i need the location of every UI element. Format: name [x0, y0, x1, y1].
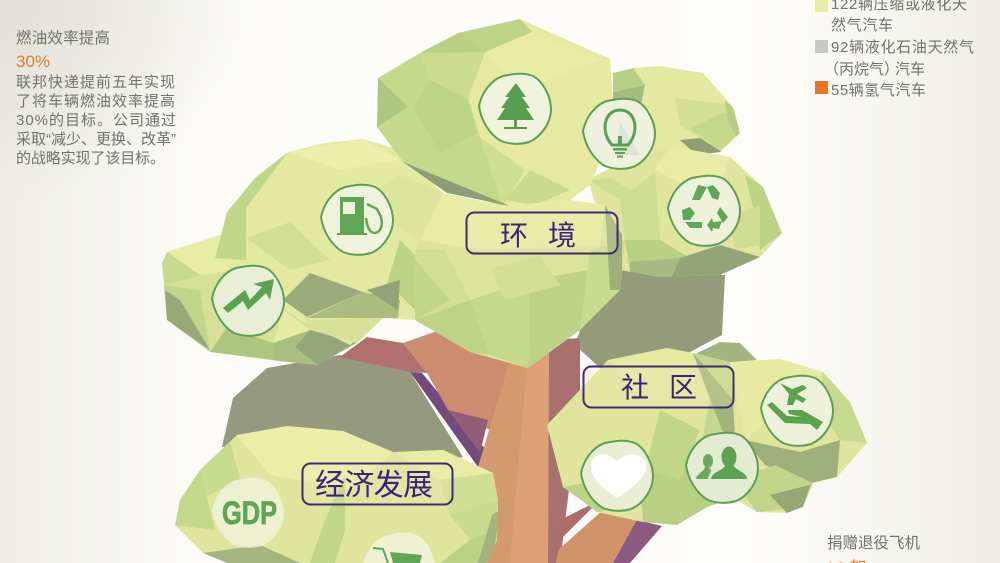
- upper orange branch: [403, 330, 520, 430]
- grey back foliage right: [575, 270, 725, 368]
- swatch: yellow: [815, 0, 828, 12]
- text block: donated aircraft: 捐赠退役飞机: [827, 534, 920, 552]
- shadow under top foliage: [403, 162, 510, 206]
- legend: alternative fuel vehicles: 92辆液化石油天然气: [831, 39, 974, 56]
- trunk mauve right side: [540, 338, 580, 563]
- text block: fuel efficiency: [16, 29, 176, 167]
- legend: alternative fuel vehicles: ）: [884, 61, 899, 78]
- main trunk orange: [468, 345, 549, 563]
- percentage: 30%: [16, 52, 50, 71]
- swatch: orange: [815, 81, 828, 94]
- icon: recycle: [668, 176, 740, 246]
- icon: fuel pump: [321, 185, 393, 255]
- icon: plane in hand: [761, 376, 833, 446]
- dark top community foliage: [697, 342, 757, 365]
- paragraph: 联邦快递提前五年实现: [16, 74, 175, 91]
- icon: GDP: [212, 478, 284, 548]
- purple branch shadow: [410, 372, 490, 467]
- legend: alternative fuel vehicles: 丙烷气: [839, 61, 884, 78]
- right foliage: [585, 145, 785, 280]
- legend: alternative fuel vehicles: 然气汽车: [831, 17, 893, 34]
- rose branch: [340, 337, 427, 373]
- icon: light bulb: [583, 99, 655, 169]
- label: 环境: 环 境: [500, 220, 576, 251]
- paragraph: 了将车辆燃油效率提高: [16, 92, 175, 110]
- icon: growth arrow: [212, 266, 284, 336]
- label: 社区: 社 区: [621, 372, 697, 403]
- right lower branch: [556, 500, 662, 563]
- icon: shopping cart: [363, 533, 435, 563]
- legend: alternative fuel vehicles: 55辆氢气汽车: [831, 82, 926, 99]
- heading: 燃油效率提高: [16, 29, 110, 47]
- paragraph: [16, 74, 176, 167]
- paragraph: 采取“减少、更换、改革”: [16, 131, 176, 148]
- economic foliage: [170, 425, 500, 563]
- legend: alternative fuel vehicles: [815, 0, 974, 99]
- tree trunk: [340, 330, 662, 563]
- label: 社区: [584, 366, 734, 408]
- paragraph: 30%的目标。公司通过: [16, 112, 176, 129]
- text block: donated aircraft: [826, 534, 920, 563]
- rose facet: [448, 410, 488, 453]
- label: 环境: [466, 212, 618, 254]
- small right foliage: [613, 66, 740, 154]
- grey back foliage left: [222, 355, 463, 470]
- label: 经济发展: 经济发展: [315, 469, 433, 502]
- legend: alternative fuel vehicles: 汽车: [895, 61, 925, 78]
- legend: alternative fuel vehicles: （: [824, 61, 839, 78]
- paragraph: 的战略实现了该目标。: [16, 150, 165, 167]
- icon: people: [686, 433, 758, 503]
- icon: tree: [479, 74, 551, 144]
- left foliage two: [210, 135, 450, 350]
- centre foliage: [410, 190, 630, 370]
- community foliage: [540, 345, 870, 530]
- swatch: grey: [815, 40, 828, 53]
- icon: heart: [581, 441, 653, 511]
- icon: GDP: GDP: [222, 495, 277, 531]
- top foliage: [370, 15, 620, 210]
- label: 经济发展: [302, 464, 452, 504]
- left foliage one: [162, 235, 383, 365]
